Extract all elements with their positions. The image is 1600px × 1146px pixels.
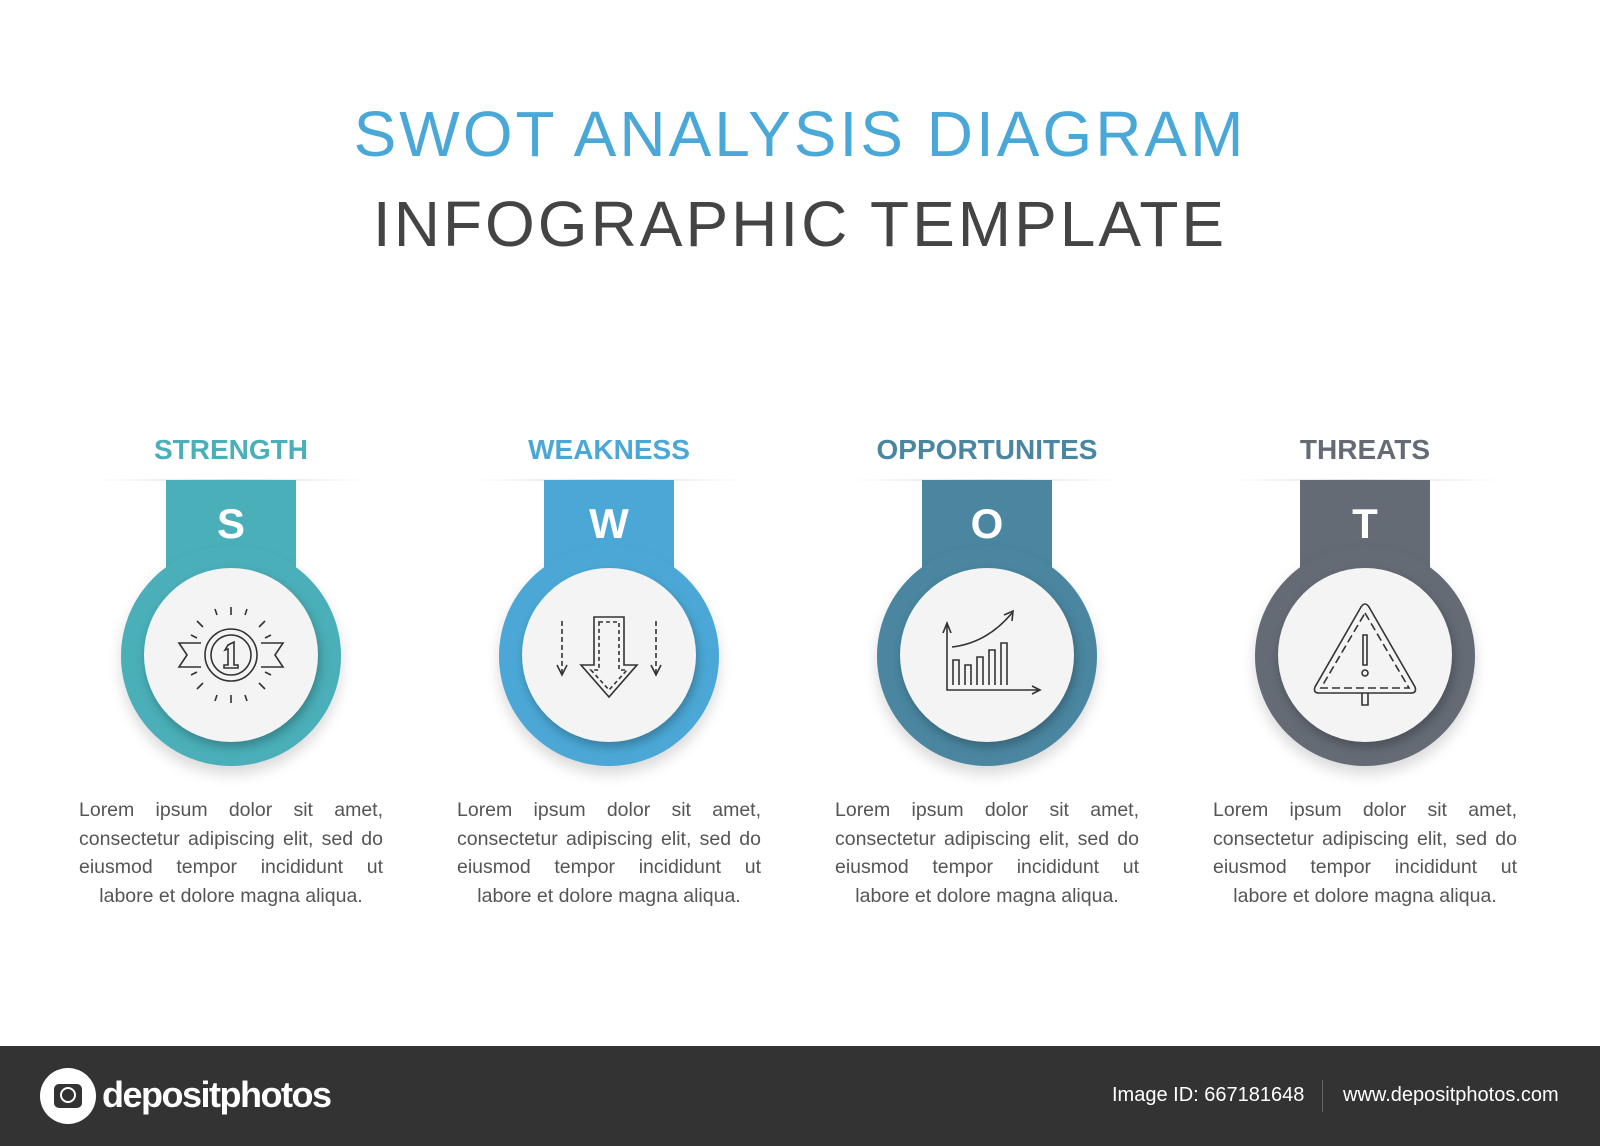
heading: threats: THREATS [1300,434,1430,465]
website: www.depositphotos.com [1343,1084,1559,1106]
panel: threats [1213,434,1517,907]
logo: depositphotos [102,1074,330,1115]
tab S [166,480,296,590]
tab T [1300,480,1430,590]
text block: Lorem ipsum dolor sit amet, consectetur adipiscing elit, sed do eiusmod tempor incididunt ut labore et dolore magna aliqua. [835,799,1139,907]
heading: opportunities: OPPORTUNITES [877,434,1097,465]
icon: award [144,568,318,742]
image id: Image ID: 667181648 [1112,1084,1304,1106]
footer bar [0,1046,1600,1146]
title line 2: INFOGRAPHIC TEMPLATE [373,188,1227,260]
heading: strength: STRENGTH [154,434,308,465]
title line 1: SWOT ANALYSIS DIAGRAM [354,98,1246,170]
text block: Lorem ipsum dolor sit amet, consectetur adipiscing elit, sed do eiusmod tempor incididunt ut labore et dolore magna aliqua. [457,799,761,907]
tab W: W [589,500,629,547]
outer circle [121,546,341,766]
outer circle [499,546,719,766]
tab O [922,480,1052,590]
text block: Lorem ipsum dolor sit amet, consectetur adipiscing elit, sed do eiusmod tempor incididunt ut labore et dolore magna aliqua. [79,799,383,907]
outer circle [1255,546,1475,766]
tab S: S [217,500,245,547]
text block: Lorem ipsum dolor sit amet, consectetur adipiscing elit, sed do eiusmod tempor incididunt ut labore et dolore magna aliqua. [1213,799,1517,907]
heading: weakness: WEAKNESS [528,434,690,465]
tab T: T [1352,500,1378,547]
panel: opportunities [835,434,1139,907]
outer circle [877,546,1097,766]
panel: weakness [457,434,761,907]
logo [40,1068,331,1124]
tab O: O [971,500,1003,547]
icon: warning sign [1278,568,1452,742]
icon: down arrows [522,568,696,742]
panel: strength [79,434,383,907]
icon: growth chart [900,568,1074,742]
tab W [544,480,674,590]
